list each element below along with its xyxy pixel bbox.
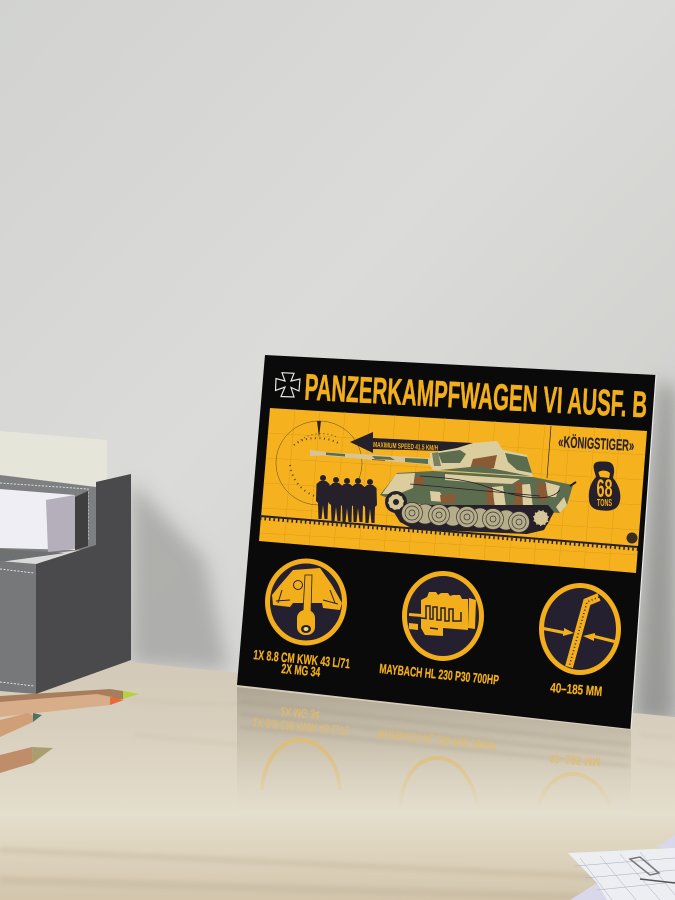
white cards xyxy=(0,489,75,550)
tank xyxy=(310,441,576,534)
wall shadow xyxy=(130,380,675,722)
ground line xyxy=(260,516,638,550)
front face xyxy=(0,561,36,694)
reflection xyxy=(237,687,631,820)
label: armament: 2X MG 34 xyxy=(281,661,321,680)
range dial xyxy=(276,421,362,505)
kettlebell 68 tons xyxy=(589,461,620,511)
reflected rings xyxy=(262,740,612,820)
yellow panel xyxy=(259,408,647,573)
turret xyxy=(430,441,533,477)
reflected labels: MAYBACH HL 230 P30 700HP xyxy=(377,726,498,754)
icon: armour xyxy=(542,586,618,672)
iron cross xyxy=(276,373,300,397)
idler wheel xyxy=(533,510,549,526)
pencils xyxy=(0,689,139,773)
organizer xyxy=(0,431,131,694)
gun barrel xyxy=(310,450,430,465)
label: armament xyxy=(253,647,351,680)
drive sprocket xyxy=(385,491,407,513)
label: armour: 40–185 MM xyxy=(550,680,603,699)
icon: turret xyxy=(268,561,344,643)
kettlebell 68 tons: 68 xyxy=(596,475,613,503)
hull xyxy=(380,471,573,513)
stamp xyxy=(626,532,638,544)
reflected labels: 2X MG 34 xyxy=(280,704,321,722)
icon: engine xyxy=(404,574,482,658)
soldiers xyxy=(316,475,377,523)
table xyxy=(0,648,675,900)
note paper and clip xyxy=(568,835,675,900)
dark side xyxy=(36,474,131,694)
reflected labels xyxy=(252,704,601,770)
label: engine: MAYBACH HL 230 P30 700HP xyxy=(379,661,500,688)
kettlebell 68 tons: TONS xyxy=(597,497,612,509)
road wheels xyxy=(402,502,530,532)
board xyxy=(237,355,656,729)
reflected labels: 1X 8.8 CM KWK 43 L/71 xyxy=(252,715,350,738)
wall xyxy=(0,0,675,720)
speed label: MAXIMUM SPEED 41.5 KM/H xyxy=(373,440,438,452)
cream paper xyxy=(0,431,107,490)
speed arrow xyxy=(350,432,473,453)
track xyxy=(385,498,554,534)
reflected labels: 40–185 MM xyxy=(548,751,601,770)
board background xyxy=(237,355,656,729)
annotation line xyxy=(547,426,551,478)
table wood grain xyxy=(0,700,675,900)
label: armament: 1X 8.8 CM KWK 43 L/71 xyxy=(253,647,351,671)
